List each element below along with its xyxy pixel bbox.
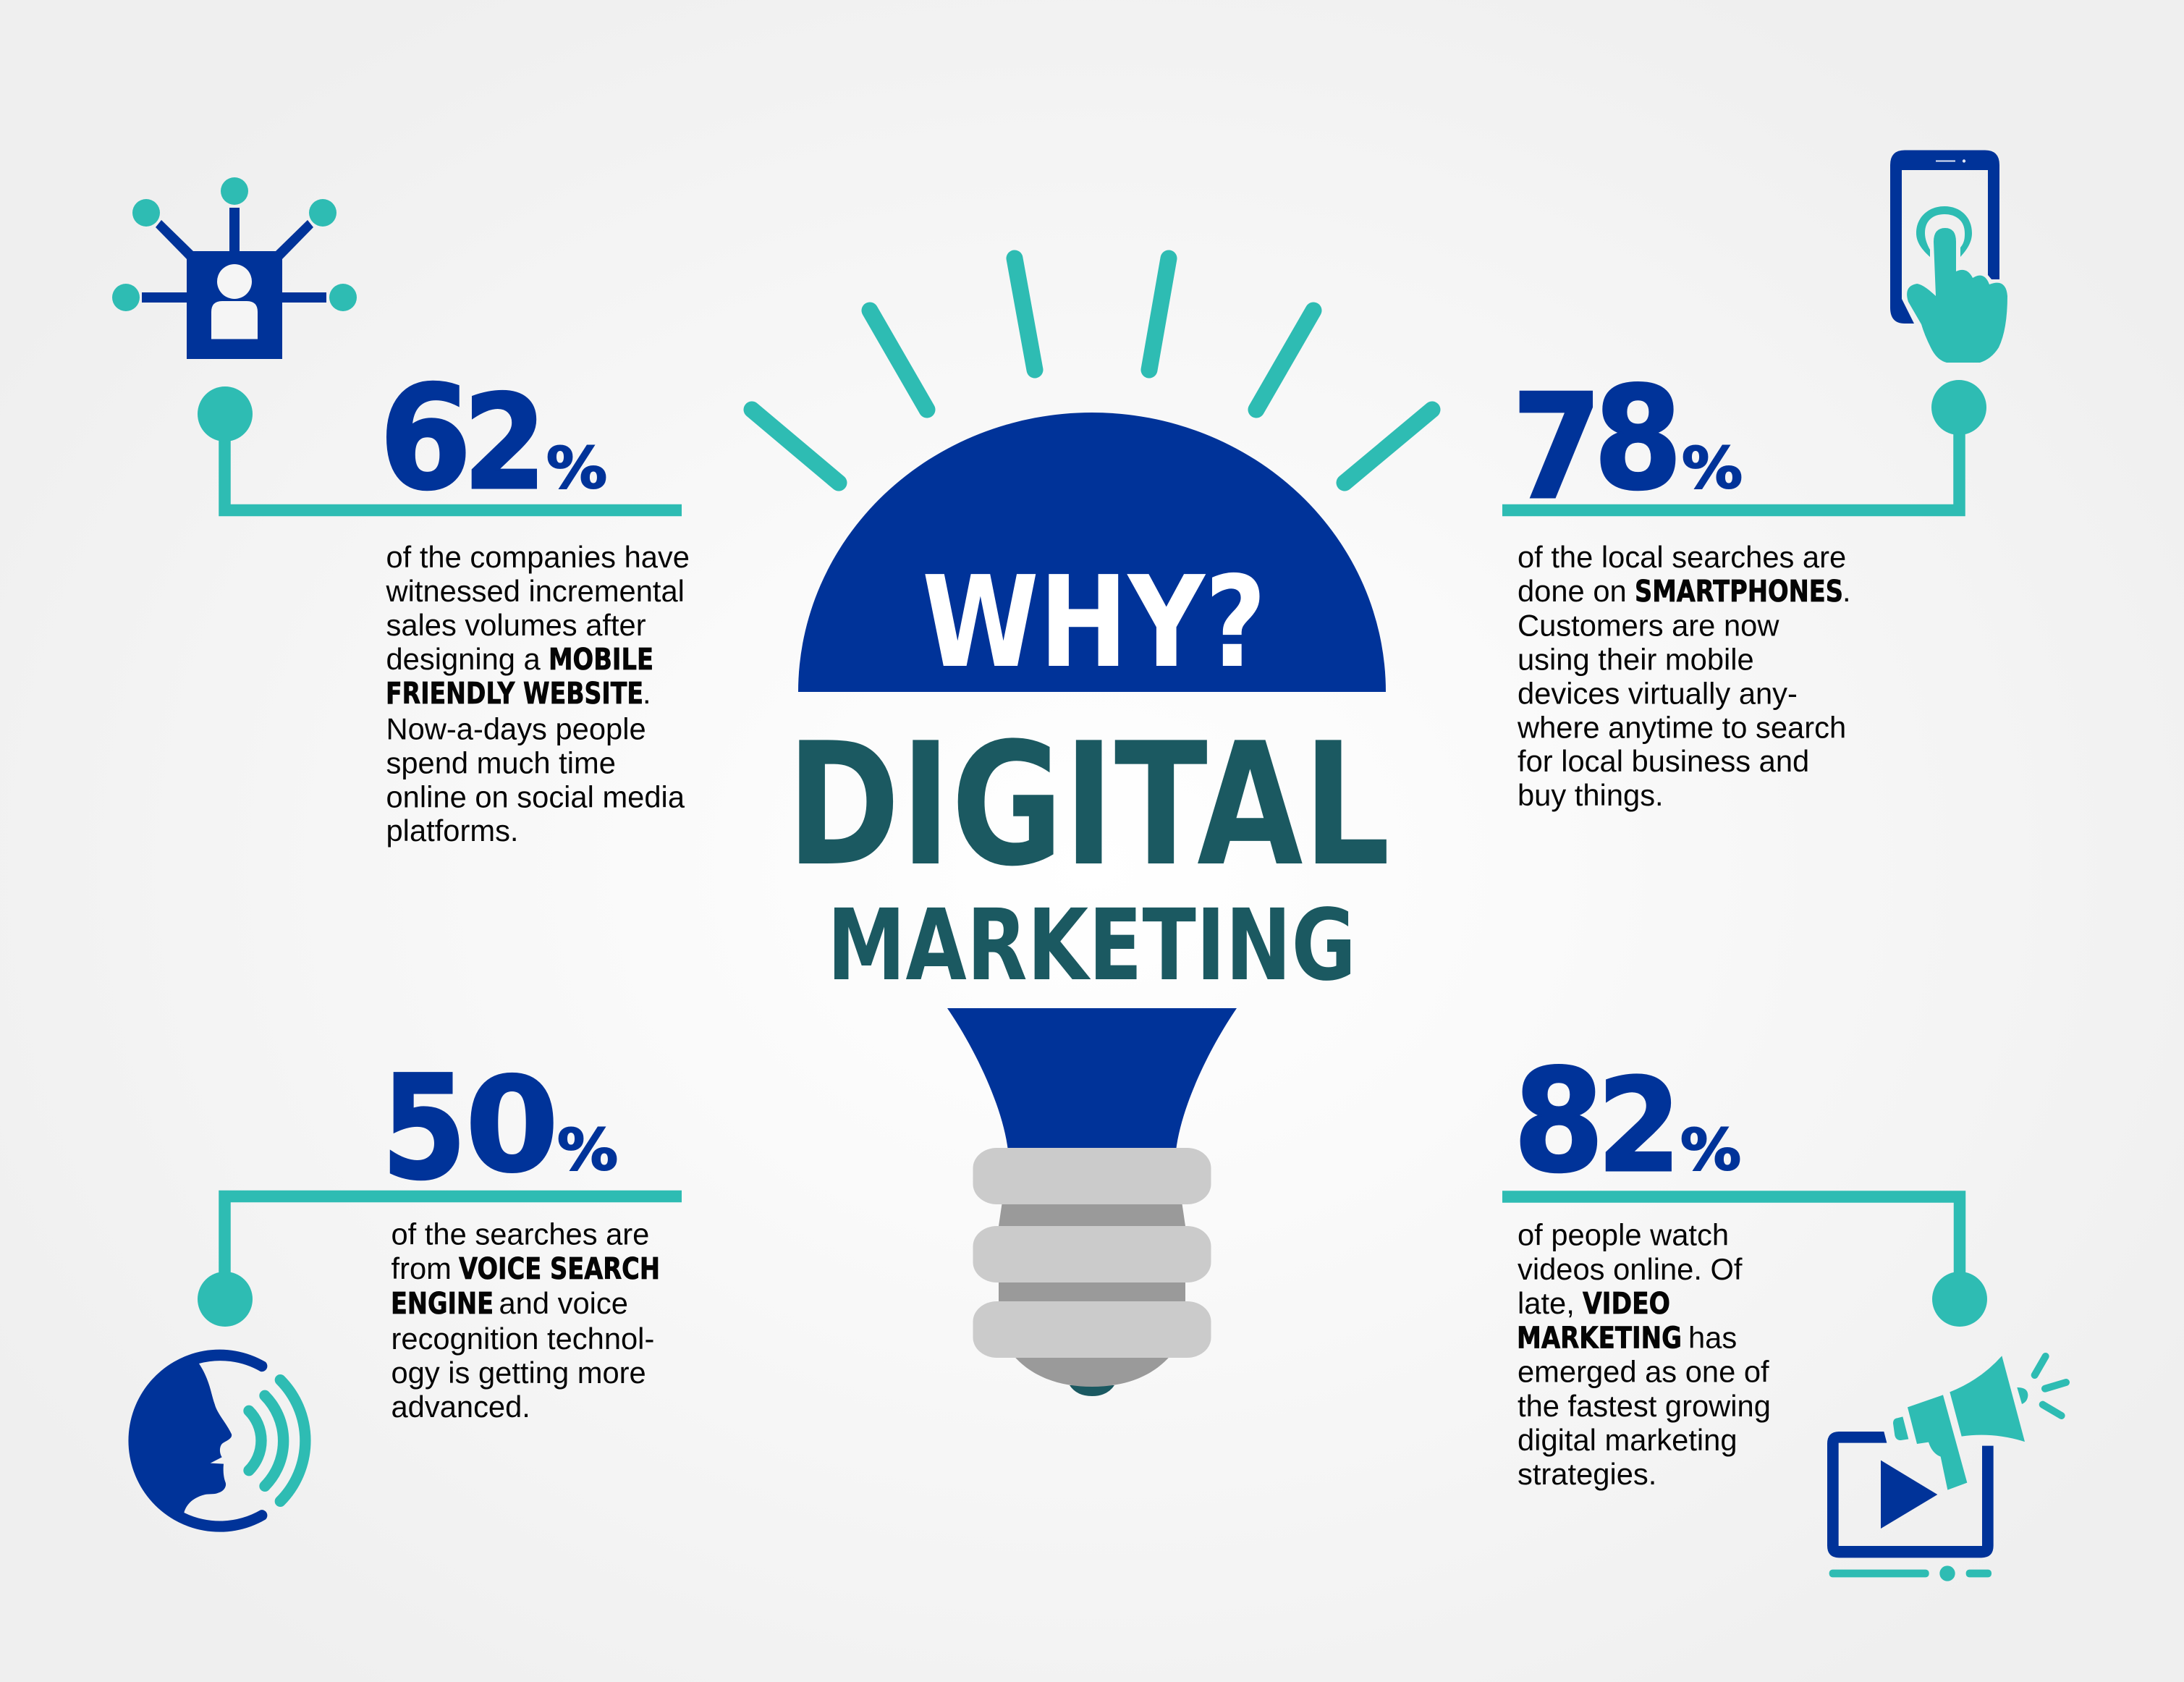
heading: WHY?: WHY? [922,549,1266,696]
description text: of the companies have [386,540,690,574]
description text: of the local searches are [1518,540,1846,574]
stat: 82% [1513,1039,1741,1204]
heading: MARKETING: MARKETING [827,889,1356,1003]
connector line [198,386,682,510]
description text: emerged as one of [1518,1355,1769,1388]
description text: designing a [386,642,541,676]
description text: MOBILE [549,642,653,677]
description text: of people watch [1518,1217,1729,1252]
description text: witnessed incremental [385,574,685,608]
description text: the fastest growing [1518,1389,1771,1423]
bulb screw base [973,1148,1211,1396]
stat: 62% [379,355,607,522]
description text: VIDEO [1583,1286,1670,1321]
description text: Now-a-days people [386,712,646,745]
stat: 78%: 7 [1512,363,1602,532]
heading: DIGITAL: DIGITAL [787,707,1390,904]
central light bulb [752,258,1432,1396]
description text: MARKETING [1517,1320,1682,1355]
description text: . [1842,574,1851,608]
description text [1517,1217,1771,1491]
description text: FRIENDLY WEBSITE [386,676,643,711]
connector line [1502,1197,1987,1327]
stat: 78% [1512,357,1743,532]
description text: ENGINE [391,1286,494,1321]
description text: late, [1518,1286,1575,1320]
description text: spend much time [386,745,616,780]
description text [391,1217,660,1424]
stat: 82%: 8 [1513,1039,1604,1204]
description text: and voice [499,1286,628,1320]
stat: 62%: % [546,436,607,502]
description text: has [1688,1320,1737,1355]
icon: speaking head [128,1350,305,1532]
panel: 62% mobile friendly website [112,177,690,848]
bulb light rays [752,258,1432,483]
description text: using their mobile [1518,643,1754,676]
stat: 78%: 8 [1593,357,1683,522]
description text: for local business and [1518,744,1809,778]
stat: 62%: 2 [463,368,546,519]
description text: sales volumes after [386,608,646,642]
stat: 62%: 6 [379,355,472,522]
description text: devices virtually any- [1518,676,1798,711]
stat: 82%: 2 [1597,1051,1681,1201]
stat: 50%: 5 [381,1044,467,1212]
connector line [198,1196,682,1327]
stat: 50%: 0 [465,1050,559,1201]
panel: 82% video marketing [1502,1039,2066,1581]
icon: network user [112,177,357,359]
bulb neck [947,1008,1237,1151]
icon: smartphone with tapping hand [1890,151,2007,363]
stat: 82%: % [1680,1118,1741,1183]
description text: . [643,676,651,710]
description text: strategies. [1518,1457,1656,1491]
description text: done on [1518,574,1627,608]
description text: VOICE SEARCH [459,1251,660,1286]
stat: 78%: % [1682,436,1743,502]
icon: video screen with megaphone [1827,1356,2066,1581]
stat: 50%: % [557,1118,618,1183]
description text: platforms. [386,813,519,848]
stat: 50% [381,1044,618,1212]
description text: ogy is getting more [391,1356,646,1390]
description text: buy things. [1518,778,1664,812]
description text: digital marketing [1518,1423,1738,1457]
description text: where anytime to search [1517,711,1846,744]
description text [385,540,690,848]
description text: videos online. Of [1518,1252,1743,1286]
bulb dome [798,413,1386,692]
description text: SMARTPHONES [1635,574,1843,609]
description text: advanced. [391,1390,530,1424]
description text: from [391,1251,452,1285]
panel: 50% voice search [128,1044,682,1532]
connector line [1502,380,1986,510]
description text: Customers are now [1518,608,1779,643]
panel: 78% smartphones [1502,151,2007,812]
description text: of the searches are [391,1217,649,1251]
description text: recognition technol- [391,1322,654,1356]
description text: online on social media [386,780,685,813]
description text [1517,540,1851,812]
